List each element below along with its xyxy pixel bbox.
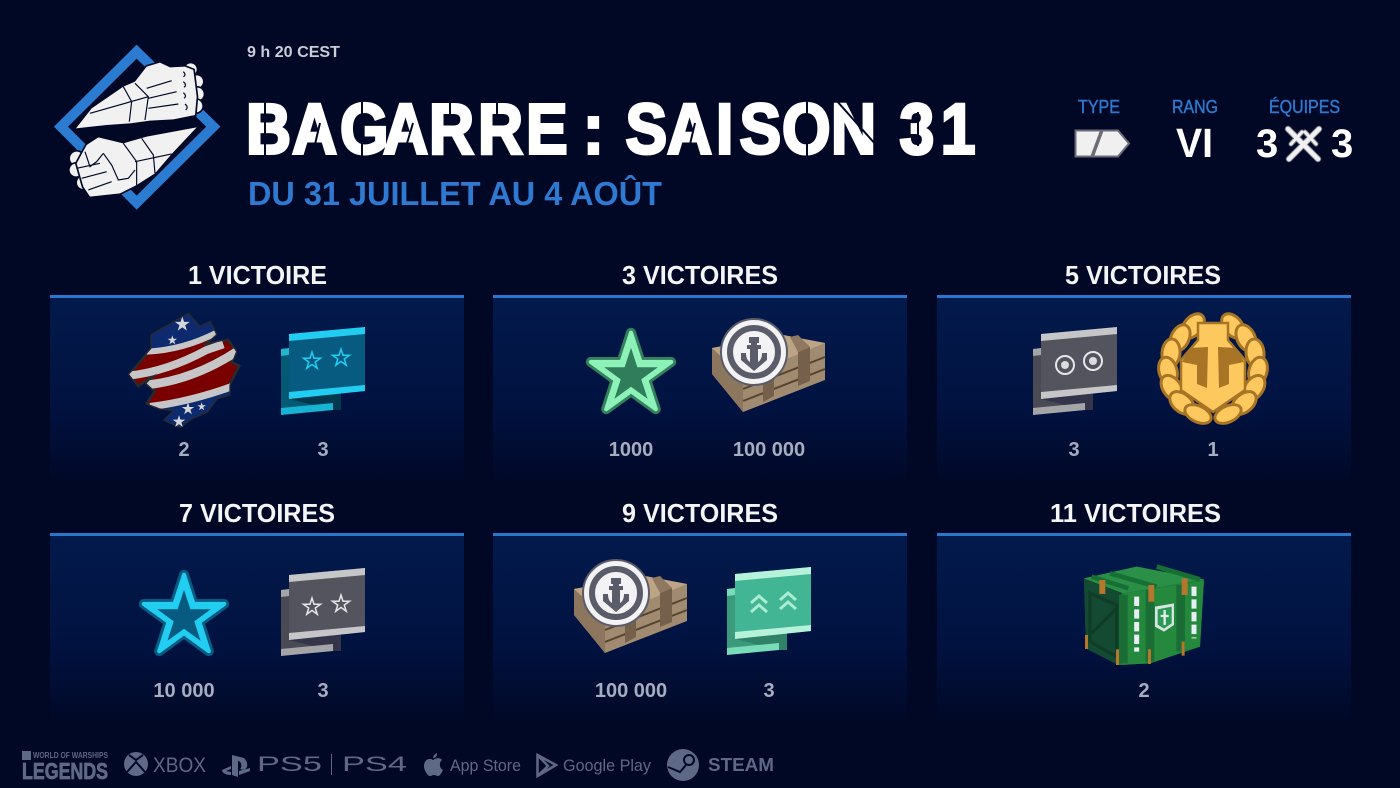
panel: 9 victoires: 100 000 — [595, 680, 667, 702]
panel: 3 victoires: 3 VICTOIRES — [622, 260, 778, 290]
footer: platform logos — [22, 749, 774, 784]
logo: google play — [538, 755, 651, 776]
logo: playstation 5 and 4: PS5 — [257, 753, 322, 776]
panel: 5 victoires — [937, 260, 1351, 485]
upper gauntlet — [76, 63, 204, 128]
panel: 9 victoires: 3 — [763, 680, 775, 702]
subtitle: dates: DU 31 JUILLET AU 4 AOÛT — [248, 174, 662, 212]
panel: 1 victoire: 1 VICTOIRE — [188, 260, 327, 290]
icon: wooden crate with coin — [712, 319, 825, 412]
icon: blue star — [144, 575, 224, 651]
stat: rang: VI — [1176, 120, 1213, 166]
logo: world of warships legends: WORLD OF WARSHIPS — [33, 751, 109, 760]
title: BAGARRE : SAISON 31 — [246, 90, 975, 169]
panel: 5 victoires: 5 VICTOIRES — [1065, 260, 1221, 290]
panel: 9 victoires: 9 VICTOIRES — [622, 498, 778, 528]
icon: golden laurel medal — [1156, 309, 1270, 427]
logo: world of warships legends — [22, 751, 109, 784]
time label: 9 h 20 CEST — [247, 44, 340, 61]
icon: green star — [591, 333, 671, 409]
logo: app store: App Store — [450, 756, 521, 775]
panel: 7 victoires: 3 — [317, 680, 329, 702]
panel: 7 victoires: 7 VICTOIRES — [179, 498, 335, 528]
logo: app store — [424, 753, 521, 776]
panel: 5 victoires: 1 — [1207, 439, 1219, 461]
panel: 11 victoires — [937, 498, 1351, 723]
icon: green crate — [1084, 567, 1204, 665]
logo: steam: STEAM — [708, 755, 774, 775]
logo: xbox — [124, 752, 206, 777]
panel: 3 victoires: 1000 — [609, 439, 653, 461]
panel: 11 victoires: 2 — [1138, 680, 1150, 702]
icon: american flag camouflage — [128, 312, 243, 432]
panel: 7 victoires: 10 000 — [153, 680, 215, 702]
panel: 1 victoire: 3 — [317, 439, 329, 461]
logo: crossed gauntlets in diamond — [61, 52, 213, 203]
stat: rang — [1172, 97, 1218, 166]
stat: type — [1076, 97, 1129, 157]
lower gauntlet — [70, 127, 197, 198]
panel: 9 victoires — [493, 498, 907, 723]
stat: type: TYPE — [1078, 97, 1120, 117]
panel: 11 victoires: 11 VICTOIRES — [1050, 498, 1221, 528]
panel: 3 victoires: 100 000 — [733, 439, 805, 461]
icon: crossed swords — [1288, 129, 1319, 159]
icon: green ribbon with chevrons — [727, 567, 811, 655]
panel: 3 victoires — [493, 260, 907, 485]
stat: rang: RANG — [1172, 97, 1218, 117]
logo: playstation 5 and 4 — [222, 753, 408, 777]
icon: wooden crate with coin — [574, 560, 687, 653]
stat: équipes: 3 — [1331, 122, 1353, 166]
panel: 1 victoire: 2 — [178, 439, 190, 461]
stat: équipes: 3 — [1256, 122, 1278, 166]
logo: playstation 5 and 4: PS4 — [342, 753, 408, 776]
logo: world of warships legends: LEGENDS — [22, 758, 108, 784]
logo: xbox: XBOX — [153, 754, 206, 777]
stat: équipes — [1256, 97, 1353, 166]
logo: steam — [667, 749, 774, 781]
logo: google play: Google Play — [563, 756, 651, 775]
panel: 7 victoires — [50, 498, 464, 723]
stat: équipes: ÉQUIPES — [1269, 97, 1340, 117]
icon: blue ribbon with stars — [281, 327, 365, 415]
icon: grey ribbon with anchors — [1033, 327, 1117, 415]
icon: type arrow — [1076, 130, 1129, 157]
logo diamond — [61, 52, 213, 203]
icon: grey ribbon with stars — [281, 568, 365, 656]
panel: 1 victoire — [50, 266, 464, 462]
panel: 5 victoires: 3 — [1068, 439, 1080, 461]
